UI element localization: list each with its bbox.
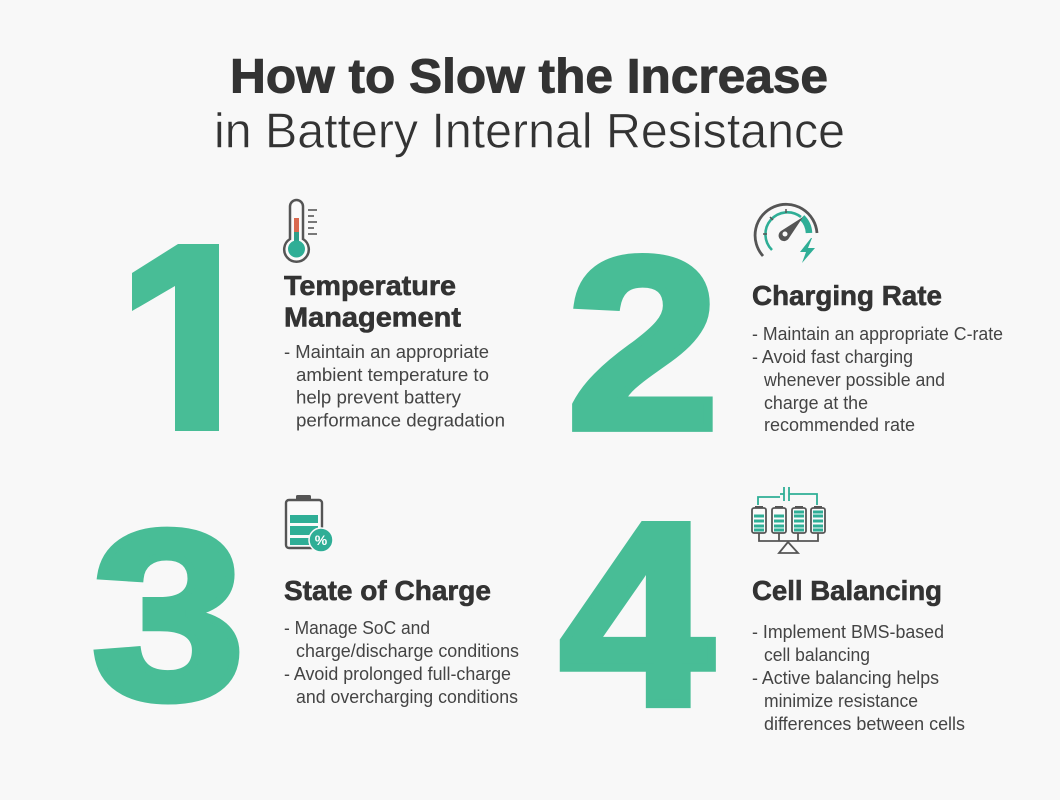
text block: and overcharging conditions — [296, 687, 518, 707]
heading: Charging Rate — [752, 280, 942, 311]
icon: cell balancing — [752, 487, 825, 553]
text block: - Avoid prolonged full-charge — [284, 664, 511, 684]
text block: - Active balancing helps — [752, 668, 939, 688]
text block: charge at the — [764, 393, 868, 413]
heading: Temperature — [284, 270, 456, 301]
text block: - Avoid fast charging — [752, 347, 913, 367]
text block — [752, 622, 965, 734]
title: How to Slow the Increase — [230, 50, 828, 104]
text block — [284, 618, 519, 707]
text block: help prevent battery — [296, 388, 461, 408]
text block: minimize resistance — [764, 691, 918, 711]
icon: battery: % — [315, 532, 328, 548]
text block: - Manage SoC and — [284, 618, 430, 638]
icon: gauge — [755, 204, 817, 263]
text block — [752, 324, 1003, 435]
text block: recommended rate — [764, 415, 915, 435]
numeral 1: 1 — [120, 194, 266, 487]
text block: - Maintain an appropriate — [284, 342, 489, 362]
panel: cell balancing — [560, 469, 965, 759]
heading: State of Charge — [284, 575, 491, 606]
text block — [284, 342, 505, 430]
panel: state of charge — [92, 480, 519, 749]
icon: battery — [286, 495, 333, 552]
heading: Management — [284, 302, 461, 332]
text block: differences between cells — [764, 714, 965, 734]
numeral 3: 3 — [92, 480, 245, 749]
panel: charging rate — [567, 204, 1003, 481]
icon: thermometer — [284, 200, 317, 262]
panel: temperature management — [132, 198, 504, 431]
text block: cell balancing — [764, 645, 870, 665]
heading: Cell Balancing — [752, 575, 942, 606]
text block: ambient temperature to — [296, 365, 489, 385]
numeral 4: 4 — [560, 469, 715, 759]
text block: performance degradation — [296, 410, 505, 430]
text block: whenever possible and — [763, 370, 945, 390]
heading — [284, 270, 461, 332]
text block: - Maintain an appropriate C-rate — [752, 324, 1003, 344]
text block: - Implement BMS-based — [752, 622, 944, 642]
numeral 2: 2 — [567, 207, 719, 481]
title: in Battery Internal Resistance — [214, 104, 845, 158]
title — [214, 50, 845, 158]
text block: charge/discharge conditions — [296, 641, 519, 661]
